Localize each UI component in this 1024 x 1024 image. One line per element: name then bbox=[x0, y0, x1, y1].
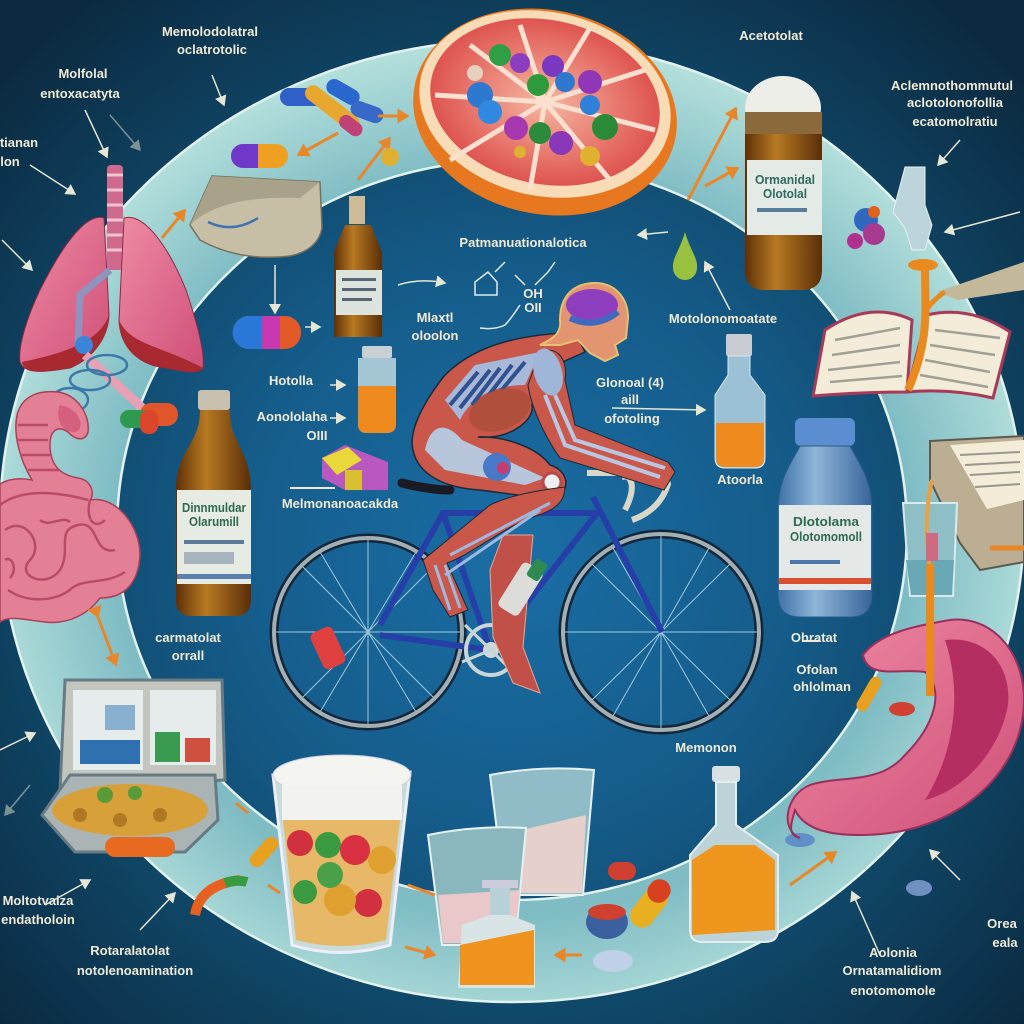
far leg bbox=[490, 535, 540, 693]
labels: carmatolat bbox=[155, 630, 222, 645]
lungs bbox=[20, 165, 203, 434]
chemical diagram: OH bbox=[523, 286, 543, 301]
labels: orrall bbox=[172, 648, 204, 663]
labels: oclatrotolic bbox=[177, 42, 247, 57]
torso and thigh bbox=[412, 332, 585, 500]
small clear bottle bbox=[715, 334, 765, 468]
cyclist bbox=[309, 283, 675, 693]
yellow pill bbox=[381, 148, 399, 166]
amber jar with powder: Ormanidal bbox=[755, 172, 815, 187]
amber jar with powder bbox=[745, 76, 822, 290]
brown bottle left bbox=[176, 390, 251, 616]
handlebars bbox=[587, 473, 668, 520]
pills cluster top bbox=[280, 76, 386, 139]
candy cubes bbox=[322, 445, 388, 490]
labels: Rotaralatolat bbox=[90, 943, 170, 958]
labels: OIII bbox=[307, 428, 327, 443]
wheels bbox=[274, 534, 759, 730]
labels: endatholoin bbox=[1, 912, 75, 927]
brown bottle left: Dinnmuldar bbox=[182, 500, 246, 515]
red part on wheel bbox=[309, 625, 347, 671]
intestines bbox=[0, 392, 140, 622]
labels: lon bbox=[0, 154, 20, 169]
small amber bottle bbox=[334, 196, 382, 337]
labels: Aonololaha bbox=[257, 409, 328, 424]
labels: Memolodolatral bbox=[162, 24, 258, 39]
orange arrows bottom bbox=[236, 803, 836, 955]
bicycle bbox=[274, 473, 759, 730]
beige pouch bbox=[190, 176, 322, 257]
labels: Ofolan bbox=[796, 662, 838, 677]
labels: oloolon bbox=[412, 328, 459, 343]
large blue bottle bbox=[778, 418, 872, 617]
stacked books bbox=[930, 436, 1024, 570]
chemical diagram: OII bbox=[524, 300, 542, 315]
labels: Ohratat bbox=[791, 630, 838, 645]
saddle bbox=[402, 483, 450, 490]
labels: Melmonanoacakda bbox=[282, 496, 399, 511]
labels: Hotolla bbox=[269, 373, 314, 388]
capsule bbox=[231, 144, 288, 168]
lunch tray with charts bbox=[42, 680, 225, 857]
stomach bbox=[788, 620, 1024, 838]
green drop bbox=[673, 232, 697, 280]
open book bbox=[813, 312, 1010, 398]
title label center: Patmanuationalotica bbox=[459, 235, 587, 250]
labels: ohlolman bbox=[793, 679, 851, 694]
lower leg bbox=[423, 487, 565, 617]
divider line bbox=[290, 488, 820, 641]
labels: Acetotolat bbox=[739, 28, 803, 43]
jar with orange liquid bbox=[358, 346, 396, 433]
pills bottom bbox=[195, 675, 932, 972]
orange square bottle bbox=[458, 880, 535, 988]
grapefruit slice bbox=[394, 0, 696, 239]
labels: Atoorla bbox=[717, 472, 764, 487]
dropper with orange stream bbox=[847, 167, 1024, 390]
large blue bottle: Olotomomoll bbox=[790, 529, 862, 544]
labels: ecatomolratiu bbox=[912, 114, 998, 129]
labels: Moltotvaiza bbox=[3, 893, 74, 908]
labels: ofotoling bbox=[604, 411, 660, 426]
arm bbox=[528, 350, 675, 490]
labels: Glonoal (4) bbox=[596, 375, 664, 390]
large blue bottle: Dlotolama bbox=[793, 514, 860, 529]
amber jar with powder: Olotolal bbox=[763, 186, 807, 201]
labels: notolenoamination bbox=[77, 963, 193, 978]
capsule blue magenta orange bbox=[233, 316, 301, 349]
orange arrows top bbox=[162, 108, 738, 238]
frame bbox=[380, 497, 662, 650]
labels: Molfolal bbox=[58, 66, 108, 81]
labels: Motolonomoatate bbox=[669, 311, 777, 326]
drinking glasses bbox=[428, 768, 594, 945]
labels: Memonon bbox=[675, 740, 737, 755]
labels: Orea bbox=[987, 916, 1018, 931]
labels: aclotolonofollia bbox=[907, 95, 1004, 110]
water glass bbox=[903, 480, 957, 696]
chemical diagram bbox=[475, 262, 555, 329]
labels: eala bbox=[992, 935, 1018, 950]
labels: Aclemnothommutul bbox=[891, 78, 1013, 93]
labels: Ornatamalidiom bbox=[843, 963, 941, 978]
labels: entoxacatyta bbox=[40, 86, 121, 101]
labels: Aolonia bbox=[869, 945, 918, 960]
flask with orange liquid bbox=[690, 766, 778, 942]
labels: Mlaxtl bbox=[417, 310, 453, 325]
orange double arrow bbox=[98, 617, 116, 665]
labels: enotomomole bbox=[850, 983, 936, 998]
labels: aill bbox=[621, 392, 639, 407]
cup of food bbox=[273, 755, 411, 952]
head bbox=[540, 283, 628, 361]
brown bottle left: Olarumill bbox=[189, 514, 239, 529]
water bottle bbox=[497, 561, 544, 618]
